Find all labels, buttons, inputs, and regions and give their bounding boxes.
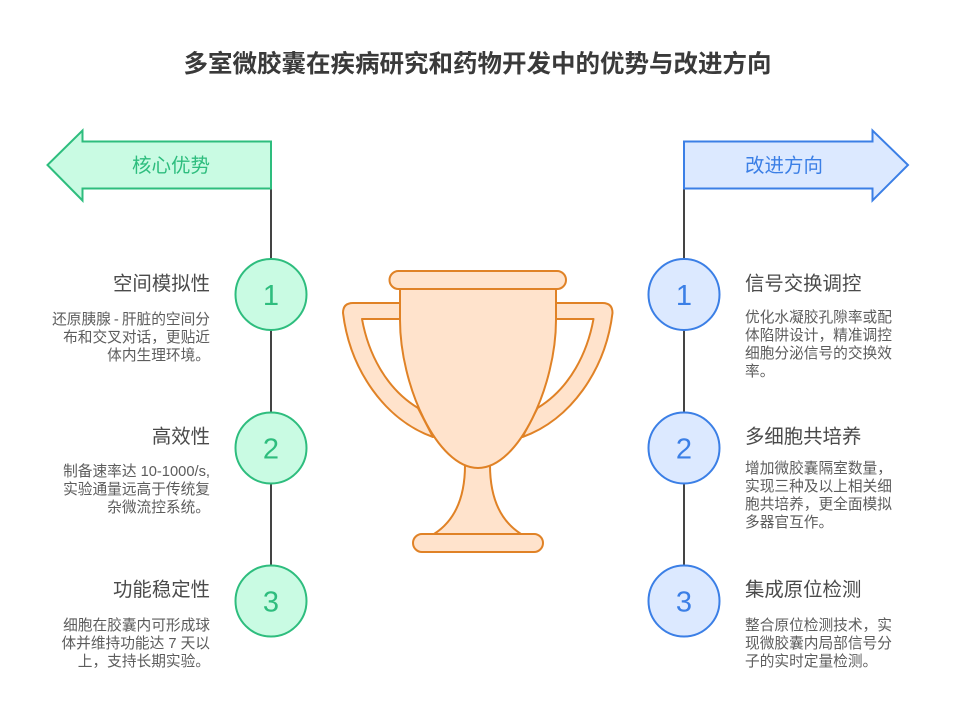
item 1: signal exchange regulation: 体陷阱设计，精准调控 [745, 327, 892, 344]
item 1: spatial simulation [52, 259, 306, 364]
item 1: signal exchange regulation: 1 [676, 280, 692, 312]
item 2: high efficiency: 杂微流控系统。 [107, 499, 210, 516]
item 2: multicellular co-culture [648, 412, 892, 531]
panel: improvement directions [648, 130, 908, 670]
arrow header: improvement directions [684, 130, 908, 200]
trophy cup [400, 289, 556, 468]
title: 多室微胶囊在疾病研究和药物开发中的优势与改进方向 [184, 49, 772, 78]
trophy left handle [343, 303, 433, 437]
item 3: integrated in situ detection [648, 566, 892, 670]
item 1: signal exchange regulation [648, 259, 892, 380]
item 2: multicellular co-culture: 胞共培养，更全面模拟 [745, 495, 892, 513]
trophy rim [390, 271, 566, 289]
trophy stem [434, 465, 521, 534]
panel: core advantages [48, 130, 306, 670]
item 2: multicellular co-culture: 2 [676, 434, 692, 466]
item 1: spatial simulation: 1 [263, 280, 279, 312]
item 3: functional stability: 上，支持长期实验。 [78, 653, 210, 670]
item 1: signal exchange regulation: 率。 [745, 363, 774, 380]
item 2: high efficiency: 高效性 [152, 426, 210, 448]
arrow header: core advantages [48, 130, 271, 200]
timeline line: left [270, 189, 272, 601]
icon: trophy [343, 271, 612, 552]
item 3: integrated in situ detection: 集成原位检测 [745, 579, 861, 601]
item 1: spatial simulation: 布和交叉对话，更贴近 [63, 328, 210, 346]
item 1: signal exchange regulation: 信号交换调控 [745, 273, 861, 295]
item 3: functional stability: 体并维持功能达 7 天以 [61, 635, 210, 652]
item 3: functional stability: 3 [263, 586, 279, 618]
item 1: signal exchange regulation: 优化水凝胶孔隙率或配 [745, 309, 892, 326]
item 1: spatial simulation: 空间模拟性 [113, 273, 210, 295]
timeline line: right [683, 189, 685, 601]
item 3: integrated in situ detection: 3 [676, 586, 692, 618]
item 3: functional stability [61, 566, 306, 670]
item 2: high efficiency [63, 412, 306, 516]
item 3: integrated in situ detection: 子的实时定量检测。 [745, 653, 877, 670]
item 2: multicellular co-culture: 实现三种及以上相关细 [745, 478, 892, 495]
item 1: signal exchange regulation: 细胞分泌信号的交换效 [745, 344, 892, 362]
item 2: multicellular co-culture: 增加微胶囊隔室数量， [745, 460, 892, 477]
item 2: high efficiency: 实验通量远高于传统复 [63, 480, 210, 498]
item 3: integrated in situ detection: 现微胶囊内局部信号分 [745, 635, 892, 652]
arrow header: improvement directions: 改进方向 [745, 155, 823, 177]
item 3: functional stability: 功能稳定性 [113, 579, 210, 601]
item 2: high efficiency: 2 [263, 434, 279, 466]
item 2: multicellular co-culture: 多器官互作。 [745, 514, 833, 531]
arrow header: core advantages: 核心优势 [132, 155, 210, 177]
item 2: multicellular co-culture: 多细胞共培养 [745, 426, 861, 448]
item 3: functional stability: 细胞在胶囊内可形成球 [63, 617, 210, 634]
item 1: spatial simulation: 体内生理环境。 [107, 346, 210, 364]
item 2: high efficiency: 制备速率达 10-1000/s, [63, 463, 210, 480]
trophy right handle [522, 303, 612, 437]
trophy base [413, 534, 543, 552]
item 3: integrated in situ detection: 整合原位检测技术，实 [745, 617, 892, 634]
item 1: spatial simulation: 还原胰腺 - 肝脏的空间分 [52, 311, 210, 328]
